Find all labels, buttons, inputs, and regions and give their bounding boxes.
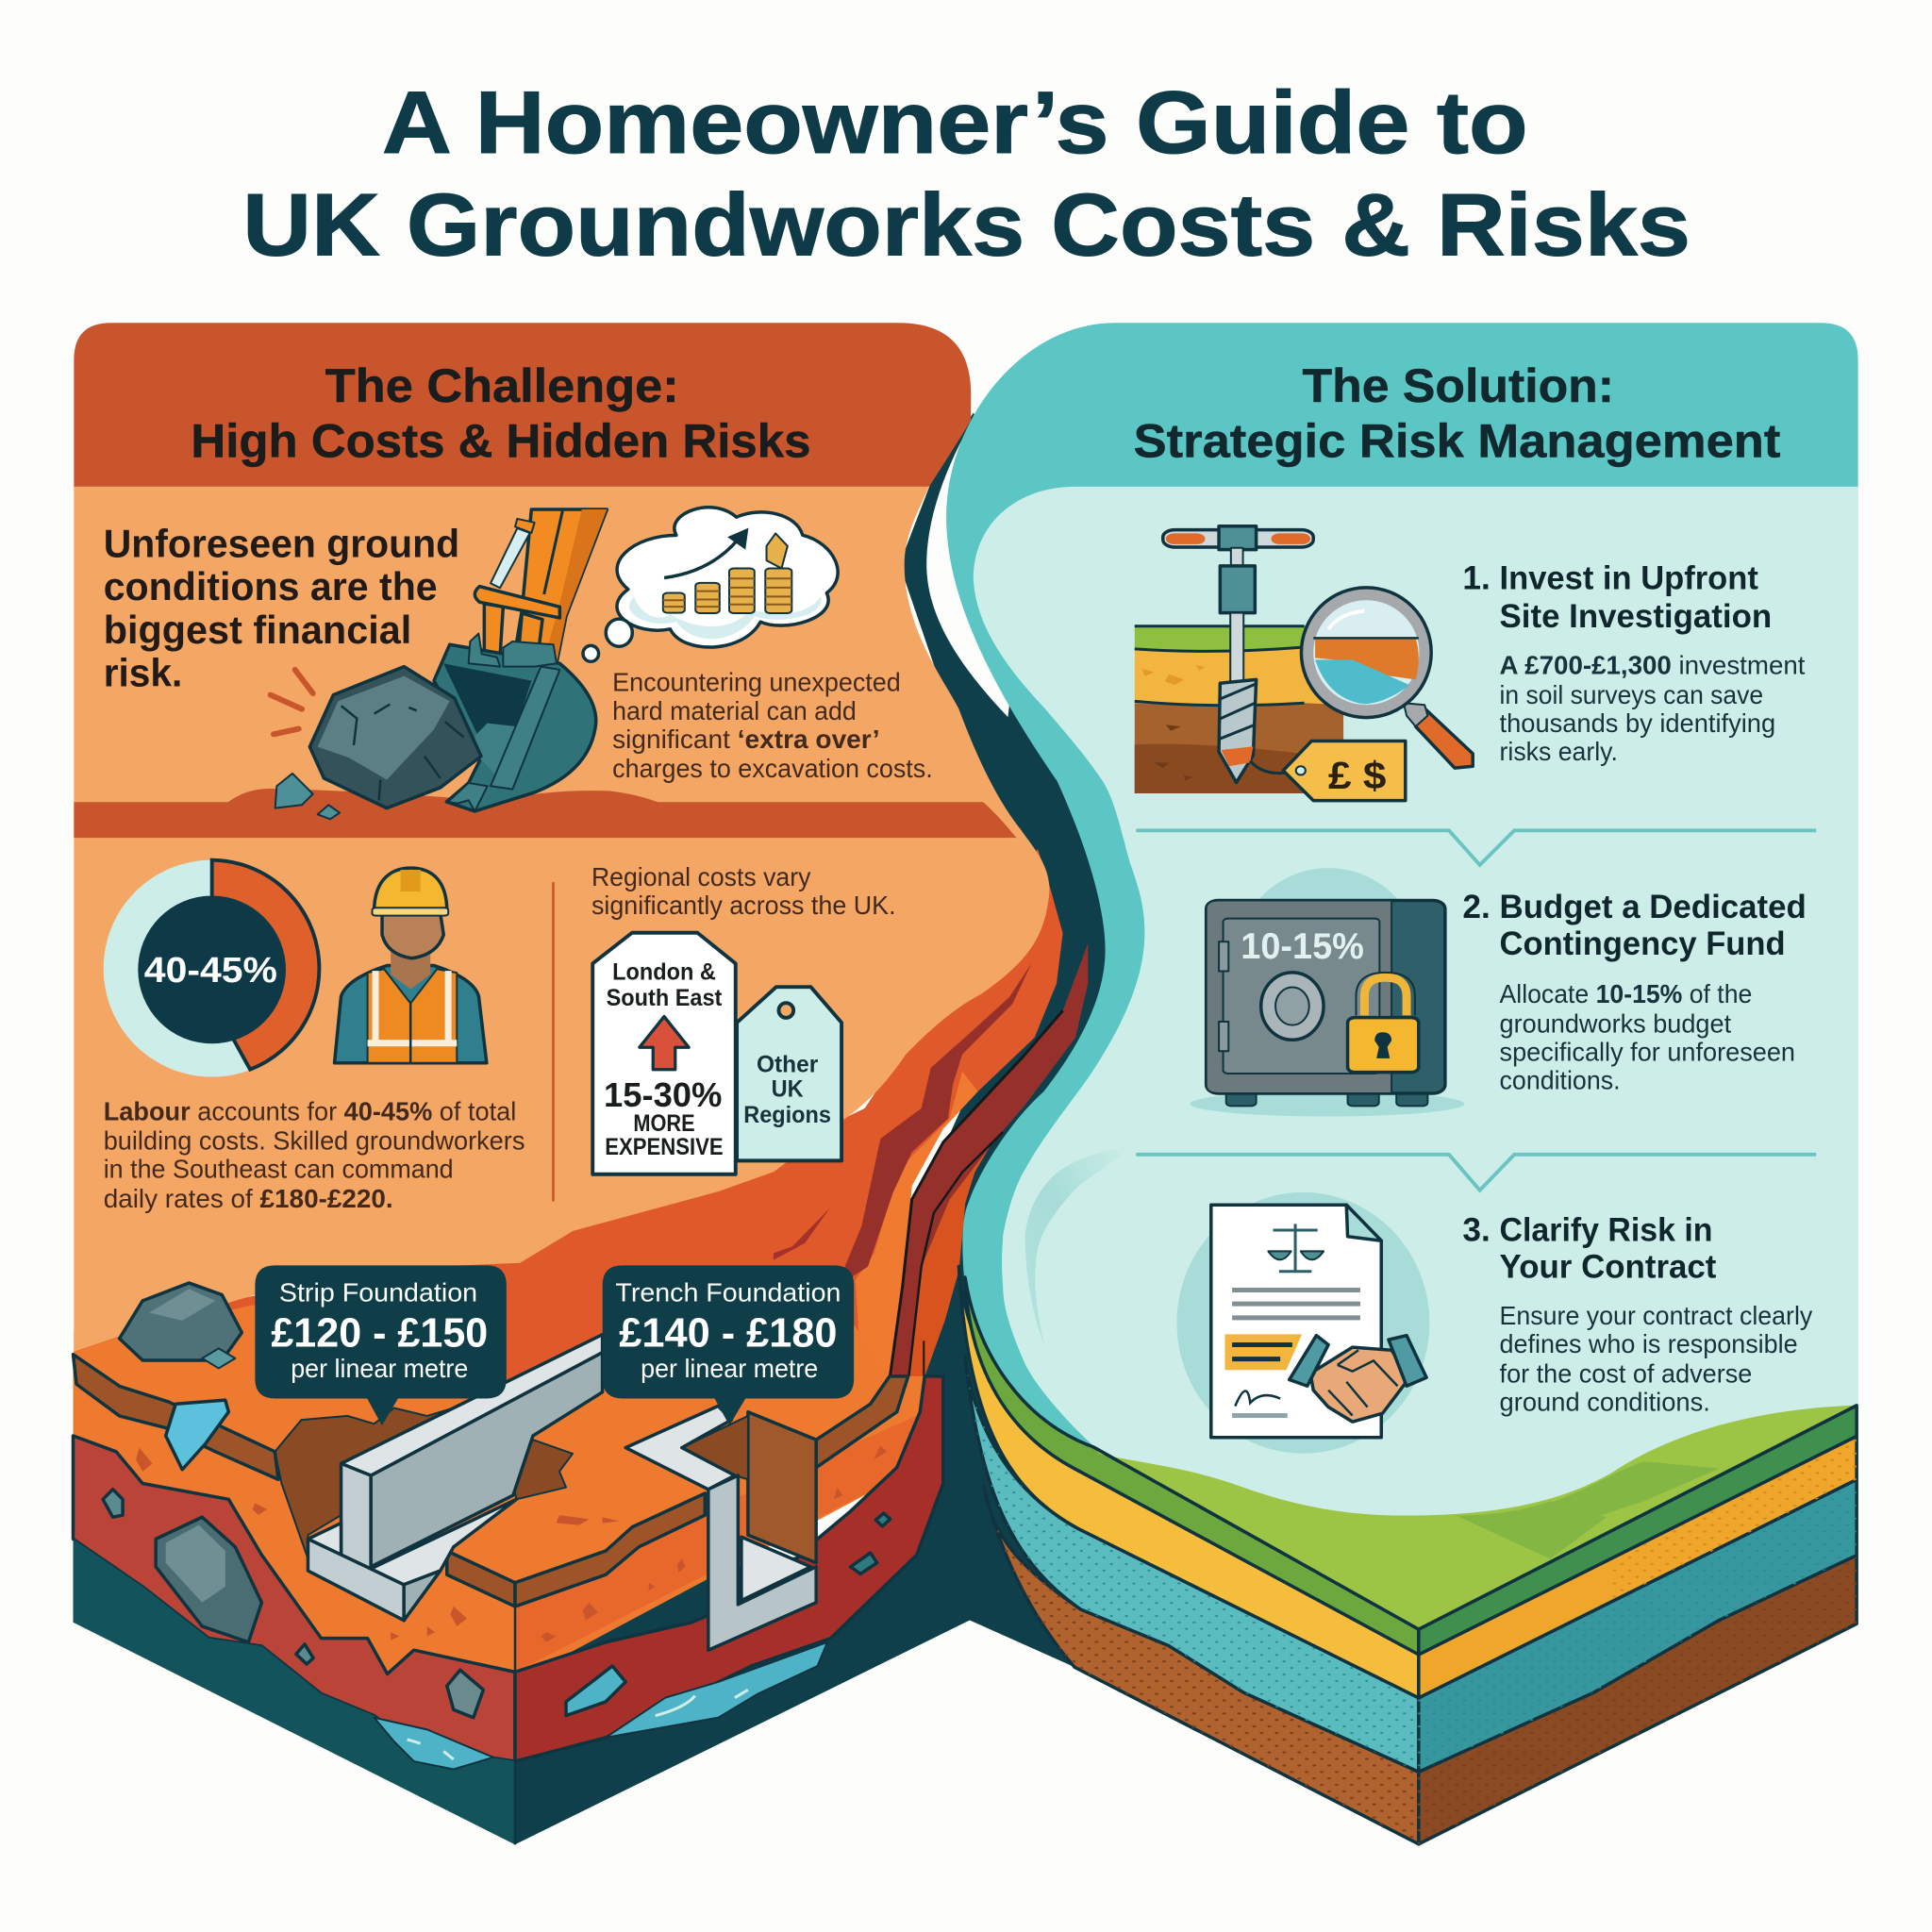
boulder [271, 667, 481, 819]
groundwater [166, 1400, 827, 1769]
document [1211, 1205, 1381, 1438]
text: regional costs: Regional costs vary [591, 862, 811, 891]
pale content background [974, 487, 1858, 1602]
callout: strip foundation: per linear metre [291, 1354, 468, 1383]
red clay right [515, 1376, 943, 1761]
price tag: London and South East: 15-30% [604, 1075, 722, 1114]
green topsoil layer [965, 1277, 1857, 1655]
step 2 text: 2. [1462, 889, 1491, 925]
callout: strip foundation: £120 - £150 [271, 1311, 488, 1357]
step 2 text: specifically for unforeseen [1500, 1038, 1795, 1067]
auger [1163, 526, 1313, 782]
text: labour cost [104, 1096, 525, 1213]
chart: labour share donut: 40-45% [144, 951, 277, 991]
bucket [434, 634, 596, 811]
icon: thought cloud with coins [583, 508, 838, 661]
text: hard material note [612, 668, 933, 783]
step 2 text [1462, 889, 1807, 1095]
price tag: London and South East: EXPENSIVE [605, 1135, 724, 1160]
brown layer [984, 1487, 1857, 1844]
step 1 text: in soil surveys can save [1500, 680, 1763, 709]
step 3 text [1462, 1211, 1813, 1417]
price tag: London and South East [592, 933, 736, 1174]
boulders [103, 1283, 891, 1718]
step 3 text: Clarify Risk in [1500, 1211, 1713, 1248]
text: key statement: risk. [104, 651, 182, 695]
price tag: London and South East: South East [607, 986, 722, 1011]
chart: labour share donut [104, 860, 321, 1077]
arrow: more expensive [640, 1017, 689, 1070]
panel: the challenge [73, 323, 1088, 1844]
step 1 text: risks early. [1500, 737, 1618, 766]
brown topsoil bands [73, 1355, 278, 1479]
step 3 text: 3. [1462, 1211, 1491, 1248]
text: labour cost: daily rates of £180-£220. [104, 1184, 393, 1213]
divider [552, 882, 554, 1201]
magnifying glass [1301, 588, 1473, 768]
step 1 text: Site Investigation [1500, 598, 1772, 635]
tag text: £ $ [1328, 754, 1386, 797]
callout: trench foundation [603, 1265, 854, 1425]
text: labour cost: building costs. Skilled groundworkers [104, 1126, 525, 1156]
text: hard material note: Encountering unexpected [612, 668, 901, 697]
callout: strip foundation [255, 1265, 507, 1425]
step 3 text: Ensure your contract clearly [1500, 1301, 1813, 1330]
price tag: other UK regions: Regions [743, 1103, 831, 1128]
title [242, 73, 1690, 274]
step 2 text: Contingency Fund [1500, 925, 1786, 962]
text: key statement: biggest financial [104, 608, 411, 652]
title: A Homeowner’s Guide to [382, 73, 1528, 172]
heading: the challenge: The Challenge: [325, 359, 679, 412]
excavator arm [475, 509, 607, 663]
orange and red strata [774, 849, 1088, 1377]
price tag: other UK regions: Other [757, 1052, 819, 1077]
step 1 text: thousands by identifying [1500, 708, 1775, 738]
step 1 text [1462, 559, 1806, 766]
callout: strip foundation: Strip Foundation [279, 1277, 477, 1307]
teal header and wave [946, 323, 1858, 1602]
teal layer [965, 1357, 1857, 1772]
text: key statement [104, 521, 459, 695]
heading: the solution [1134, 359, 1780, 468]
price tag: London and South East: London & [612, 959, 716, 985]
divider with chevron 2 [1136, 1155, 1816, 1191]
step 1 text: 1. [1462, 559, 1491, 596]
icon: contract and handshake [1176, 1192, 1429, 1454]
price tag [1250, 741, 1406, 801]
heading: the solution: Strategic Risk Management [1134, 415, 1780, 468]
soil block [1135, 625, 1343, 793]
safe label: 10-15% [1241, 926, 1364, 967]
illustration: ground cross-section with foundations [73, 1283, 943, 1844]
icon: excavator bucket and boulder [271, 509, 607, 819]
price tag: London and South East: MORE [633, 1111, 695, 1137]
step 1 text: A £700-£1,300 investment [1500, 650, 1806, 679]
callout: trench foundation: Trench Foundation [615, 1277, 841, 1307]
illustration: layered ground block [958, 1266, 1857, 1844]
red clay left [73, 1436, 515, 1761]
text: labour cost: in the Southeast can command [104, 1155, 454, 1184]
callout: trench foundation: £140 - £180 [619, 1311, 838, 1357]
white wave stripe [926, 404, 1035, 717]
heading: the solution: The Solution: [1303, 359, 1614, 412]
step 2 text: Allocate 10-15% of the [1500, 979, 1752, 1008]
step 3 text: ground conditions. [1500, 1388, 1710, 1417]
step 1 text: Invest in Upfront [1500, 559, 1758, 596]
ground strip [74, 789, 1017, 838]
panel: the solution [946, 323, 1858, 1844]
soft swirl [1025, 1145, 1132, 1344]
step 3 text: Your Contract [1500, 1248, 1717, 1285]
text: regional costs: significantly across the UK. [591, 891, 896, 920]
orange strata base [74, 1134, 789, 1602]
heading: the challenge [191, 359, 810, 468]
step 3 text: for the cost of adverse [1500, 1358, 1752, 1388]
header band [74, 323, 971, 487]
icon: soil auger and magnifier [1135, 526, 1473, 801]
peach background [74, 487, 1049, 1352]
excavated strip trench [275, 1404, 467, 1558]
soil surface [73, 1305, 924, 1694]
step 3 text: defines who is responsible [1500, 1329, 1798, 1358]
step 2 text: conditions. [1500, 1066, 1621, 1095]
text: key statement: Unforeseen ground [104, 521, 459, 565]
text: regional costs [591, 862, 896, 920]
price tag: other UK regions [737, 987, 841, 1160]
icon: construction worker [335, 868, 487, 1063]
step 2 text: Budget a Dedicated [1500, 889, 1807, 925]
grass surface [1093, 1406, 1857, 1629]
trench foundation concrete [625, 1406, 816, 1650]
handshake [1290, 1336, 1426, 1422]
soil pebbles [136, 1445, 887, 1642]
text: hard material note: hard material can add [612, 696, 857, 725]
strip foundation concrete [308, 1335, 603, 1621]
callout: trench foundation: per linear metre [641, 1354, 818, 1383]
icon: safe with padlock [1190, 868, 1464, 1117]
dark base left [73, 1539, 515, 1844]
price tag: other UK regions: UK [772, 1076, 804, 1102]
divider with chevron 1 [1136, 830, 1816, 865]
title: UK Groundworks Costs & Risks [242, 175, 1690, 274]
heading: the challenge: High Costs & Hidden Risks [191, 415, 810, 468]
text: key statement: conditions are the [104, 564, 438, 608]
text: hard material note: charges to excavation costs. [612, 754, 933, 783]
text: labour cost: Labour accounts for 40-45% of total [104, 1096, 516, 1125]
dark central wave and wedge [515, 413, 1171, 1844]
step 2 text: groundworks budget [1500, 1009, 1731, 1039]
yellow layer [958, 1266, 1857, 1698]
text: hard material note: significant ‘extra over’ [612, 724, 880, 754]
